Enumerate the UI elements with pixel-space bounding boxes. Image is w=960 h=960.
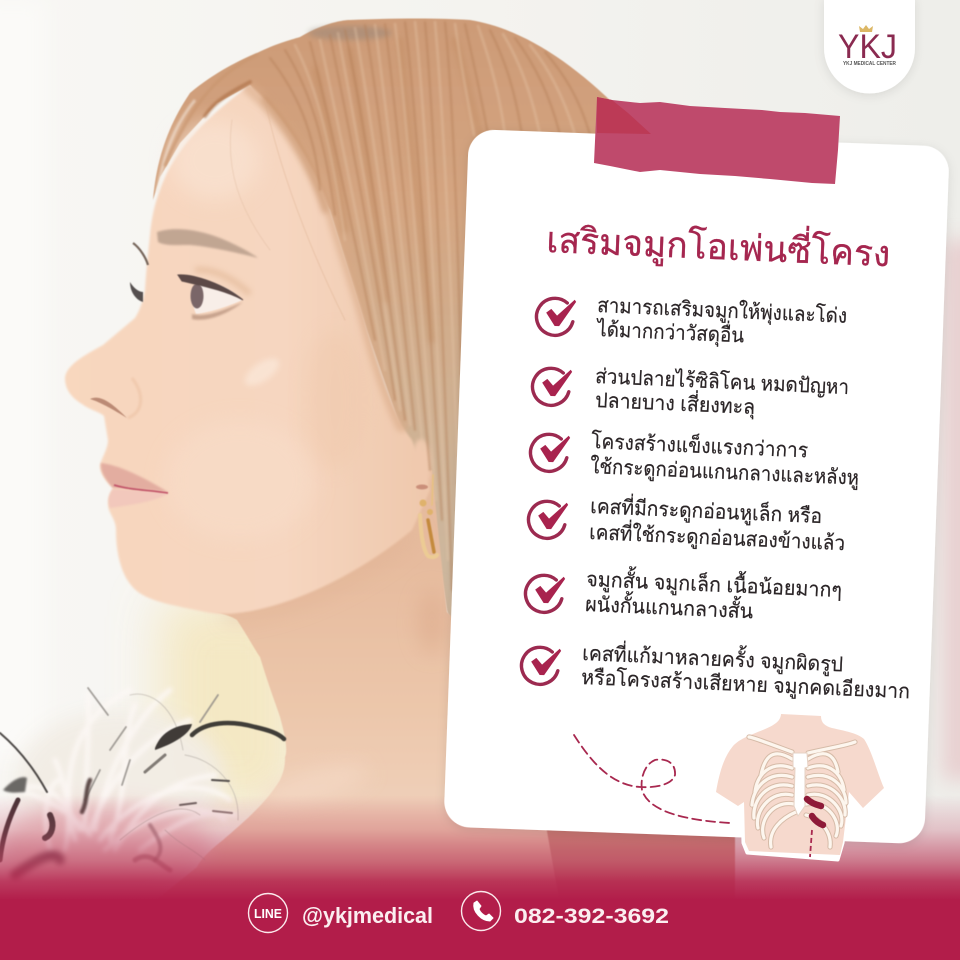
portrait: gold earring — [420, 475, 437, 557]
feather accessory — [0, 688, 284, 887]
portrait: eye — [178, 270, 250, 320]
contact: LINE badge — [248, 894, 288, 932]
contact: phone number: 082-392-3692 — [514, 904, 669, 928]
contact: phone icon — [462, 892, 500, 930]
list item 2: ส่วนปลายไร้ซิลิโคน หมดปัญหา — [595, 364, 850, 399]
portrait: near eyebrow — [157, 229, 258, 258]
list item 3: โครงสร้างแข็งแรงกว่าการ — [591, 427, 809, 462]
list item 4: เคสที่มีกระดูกอ่อนหูเล็ก หรือ — [590, 492, 823, 529]
bottom crimson gradient band — [0, 795, 960, 960]
rib outlines — [749, 737, 855, 847]
icon: check 2 — [532, 368, 572, 406]
torso skin — [716, 714, 884, 855]
portrait: neck and shoulder — [150, 470, 560, 905]
contact: LINE badge: LINE — [254, 907, 282, 921]
list item 1 — [595, 293, 848, 348]
tape on card — [594, 97, 840, 184]
icon: check 4 — [528, 501, 568, 539]
sternum — [793, 753, 808, 816]
logo tab — [824, 0, 915, 94]
portrait: nostril — [90, 378, 141, 418]
ribs — [749, 737, 855, 847]
icon: check 3 — [530, 434, 570, 472]
title: เสริมจมูกโอเพ่นซี่โครง — [546, 215, 891, 276]
list item 2: ปลายบาง เสี่ยงทะลุ — [595, 386, 756, 420]
dashed looping arrow line — [574, 735, 730, 823]
list item 4: เคสที่ใช้กระดูกอ่อนสองข้างแล้ว — [589, 518, 846, 556]
list item 5 — [585, 564, 843, 623]
portrait: far eyebrow and lashes — [130, 243, 148, 302]
icon: check 6 — [521, 647, 561, 685]
illustration: torso with rib cage — [715, 713, 885, 860]
list item 4 — [589, 492, 846, 556]
list item 3: ใช้กระดูกอ่อนแกนกลางและหลังหู — [590, 454, 860, 491]
portrait: face profile — [65, 85, 431, 614]
list item 1: สามารถเสริมจมูกให้พุ่งและโด่ง — [597, 293, 848, 329]
list item 6 — [581, 638, 911, 704]
contact: LINE handle: @ykjmedical — [302, 903, 433, 928]
panel: white note card — [443, 129, 950, 844]
list item 6: เคสที่แก้มาหลายครั้ง จมูกผิดรูป — [582, 638, 844, 677]
portrait: lips — [101, 463, 169, 508]
icon: check 5 — [525, 575, 565, 613]
logo wordmark: YKJ — [838, 28, 897, 66]
portrait: hair behind the face — [153, 18, 760, 905]
removed rib cartilage — [807, 799, 823, 825]
list item 6: หรือโครงสร้างเสียหาย จมูกคดเอียงมาก — [581, 665, 911, 704]
torso paper outline — [715, 713, 885, 860]
list item 5: ผนังกั้นแกนกลางสั้น — [585, 589, 754, 623]
list item 1: ได้มากกว่าวัสดุอื่น — [595, 315, 745, 348]
incision dashed line — [810, 830, 812, 857]
icon: check 1 — [536, 298, 576, 336]
logo subtitle: YKJ MEDICAL CENTER — [843, 61, 896, 67]
logo crown — [859, 25, 873, 32]
list item 5: จมูกสั้น จมูกเล็ก เนื้อน้อยมากๆ — [586, 564, 843, 603]
portrait: hair strands over the head — [165, 22, 590, 590]
list item 2 — [595, 364, 850, 420]
list item 3 — [590, 427, 860, 491]
